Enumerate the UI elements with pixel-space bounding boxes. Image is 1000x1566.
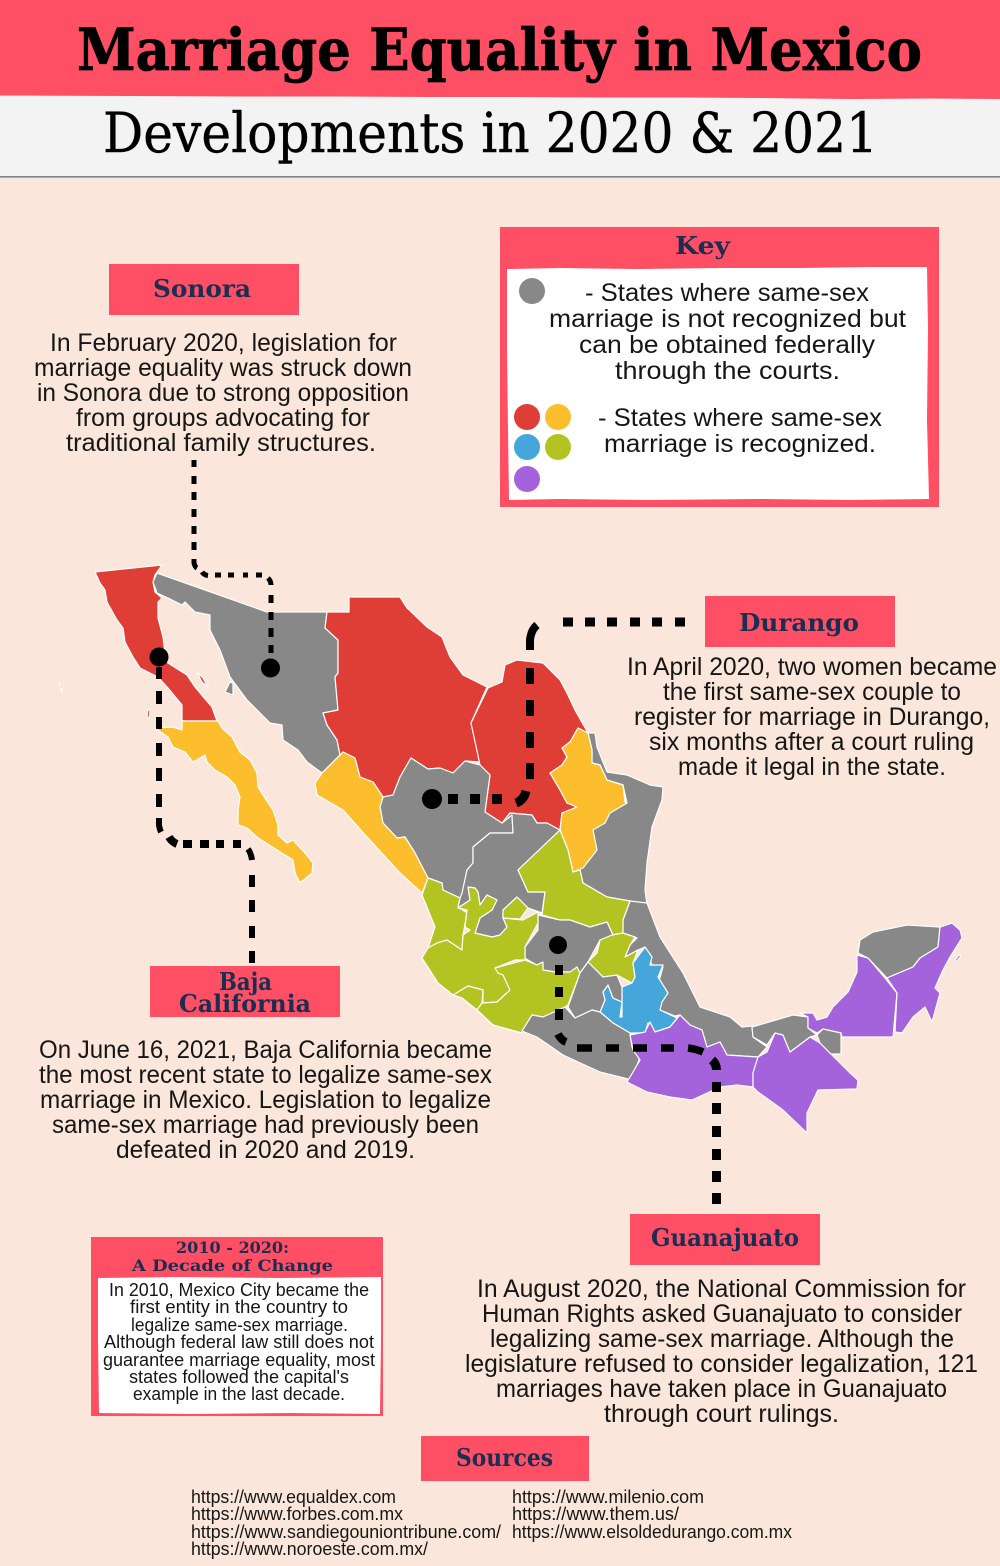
state: Oaxaca <box>627 1015 758 1100</box>
text: Sonora: from groups advocating for <box>76 404 370 432</box>
key text: recognized: marriage is recognized. <box>604 430 876 458</box>
state: Puebla, Tlaxcala and Mexico City <box>600 947 677 1033</box>
key text: not recognized: - States where same-sex <box>585 279 870 307</box>
state: Guerrero <box>522 1007 640 1080</box>
text: Baja California: same-sex marriage had previously been <box>52 1111 479 1139</box>
decade body text: In 2010, Mexico City became the <box>109 1279 369 1300</box>
islands: Baja California <box>197 672 208 687</box>
state: Tamaulipas <box>570 733 663 905</box>
text: Guanajuato: marriages have taken place in Guanajuato <box>496 1375 947 1403</box>
island: Cozumel <box>955 955 961 962</box>
label: Guanajuato: Guanajuato <box>651 1223 799 1252</box>
state: San Luis Potosi <box>518 830 630 935</box>
label: Sonora: Sonora <box>153 274 251 303</box>
state: Nuevo Leon <box>550 728 627 872</box>
key heading: Key <box>675 231 731 260</box>
decade heading: A Decade of Change <box>131 1256 333 1275</box>
panel: a decade of change <box>91 1237 383 1416</box>
text: Guanajuato: legalizing same-sex marriage. Although the <box>490 1325 954 1353</box>
title band <box>0 0 1000 99</box>
text: Sonora: marriage equality was struck down <box>34 354 412 382</box>
source list <box>191 1487 792 1559</box>
source list: https://www.sandiegouniontribune.com/ <box>191 1522 501 1542</box>
swatches: recognized <box>514 404 571 492</box>
text: Guanajuato <box>465 1275 978 1428</box>
connector: Baja California <box>150 648 252 963</box>
decade body text: legalize same-sex marriage. <box>131 1314 348 1335</box>
state: Sonora <box>153 573 340 773</box>
swatch: not recognized <box>519 278 545 304</box>
label: Durango: Durango <box>739 608 859 637</box>
connector: Durango <box>422 622 685 809</box>
decade inner panel <box>98 1277 381 1414</box>
state: Nayarit <box>422 878 467 950</box>
state: Colima <box>453 986 483 1010</box>
decade body text <box>103 1279 375 1404</box>
text: Baja California: marriage in Mexico. Legislation to legalize <box>40 1086 491 1114</box>
text: Guanajuato: through court rulings. <box>604 1400 839 1428</box>
text: Guanajuato: Human Rights asked Guanajuato to consider <box>482 1300 962 1328</box>
connector: Guanajuato <box>549 936 716 1204</box>
state: Coahuila <box>471 660 588 830</box>
source list: https://www.noroeste.com.mx/ <box>191 1539 428 1559</box>
label: Durango <box>705 596 895 647</box>
decade body text: states followed the capital's <box>129 1366 349 1387</box>
decade body text: example in the last decade. <box>133 1383 345 1404</box>
state: Campeche <box>800 955 897 1037</box>
island: Tiburon <box>225 682 233 695</box>
source list: https://www.forbes.com.mx <box>191 1504 403 1524</box>
key text: not recognized: can be obtained federally <box>579 331 876 359</box>
state: Queretaro and Hidalgo <box>588 933 638 983</box>
state: Baja California Sur <box>155 721 313 883</box>
state: Estado de Mexico and Morelos <box>568 962 622 1018</box>
decade body text: first entity in the country to <box>130 1296 348 1317</box>
island: Cedros <box>147 709 150 718</box>
key inner panel <box>507 267 929 500</box>
text: Baja California <box>39 1036 492 1164</box>
decade body text: guarantee marriage equality, most <box>103 1349 375 1370</box>
state: Jalisco <box>422 887 538 1003</box>
state: Durango <box>380 758 513 903</box>
state: Quintana Roo <box>887 923 962 1033</box>
text: Sonora <box>34 329 412 457</box>
state: Chiapas <box>753 1033 858 1133</box>
text: Durango: six months after a court ruling <box>649 728 974 756</box>
state: Tabasco <box>752 1015 817 1052</box>
island: Guadalupe <box>59 683 62 692</box>
border area: southern Campeche <box>817 1029 841 1054</box>
text: Baja California: On June 16, 2021, Baja California became <box>39 1036 492 1064</box>
subtitle: Developments in 2020 & 2021 <box>103 101 878 165</box>
text: Durango: the first same-sex couple to <box>663 678 961 706</box>
label: Sources <box>421 1436 589 1481</box>
source list: https://www.equaldex.com <box>191 1487 396 1507</box>
text: Durango <box>627 653 997 781</box>
state: Zacatecas <box>458 813 560 937</box>
key text: recognized: - States where same-sex <box>598 404 883 432</box>
label: Sonora <box>109 264 299 315</box>
state: Veracruz <box>623 901 767 1057</box>
state: Sinaloa <box>315 752 428 893</box>
source list: https://www.them.us/ <box>512 1504 679 1524</box>
label: Baja California <box>150 966 340 1018</box>
connector: Sonora <box>194 460 280 678</box>
decade heading: 2010 - 2020: <box>176 1238 289 1257</box>
panel: key <box>500 227 939 507</box>
text: Guanajuato: In August 2020, the National Commission for <box>477 1275 966 1303</box>
label: Baja California: California <box>179 989 311 1018</box>
title: Marriage Equality in Mexico <box>77 16 922 84</box>
label: Guanajuato <box>630 1214 820 1265</box>
state: Michoacan <box>477 960 580 1033</box>
text: Sonora: in Sonora due to strong opposition <box>37 379 409 407</box>
map of Mexico <box>59 565 962 1133</box>
text: Guanajuato: legislature refused to consider legalization, 121 <box>465 1350 978 1378</box>
text: Durango: register for marriage in Durango, <box>634 703 990 731</box>
text: Sonora: In February 2020, legislation for <box>50 329 397 357</box>
text: Sonora: traditional family structures. <box>66 429 376 457</box>
state: Guanajuato <box>525 915 613 973</box>
key text: not recognized: through the courts. <box>615 357 840 385</box>
key text: not recognized <box>549 279 906 385</box>
source list: https://www.milenio.com <box>512 1487 704 1507</box>
source list: https://www.elsoldedurango.com.mx <box>512 1522 792 1542</box>
state: Aguascalientes <box>503 897 528 919</box>
label: Sources: Sources <box>456 1443 553 1472</box>
label: Baja California: Baja <box>219 967 272 996</box>
subtitle band <box>0 90 1000 178</box>
decade body text: Although federal law still does not <box>104 1331 374 1352</box>
key text: not recognized: marriage is not recognized but <box>549 305 906 333</box>
state: Baja California <box>95 565 217 721</box>
state: Yucatan <box>858 925 940 978</box>
key background <box>500 227 939 507</box>
decade background <box>91 1237 383 1416</box>
text: Baja California: defeated in 2020 and 2019. <box>116 1136 415 1164</box>
key text: recognized <box>598 404 883 458</box>
state: Chihuahua <box>323 597 487 797</box>
decade heading <box>131 1238 333 1275</box>
text: Baja California: the most recent state to legalize same-sex <box>39 1061 492 1089</box>
text: Durango: In April 2020, two women became <box>627 653 997 681</box>
text: Durango: made it legal in the state. <box>678 753 946 781</box>
